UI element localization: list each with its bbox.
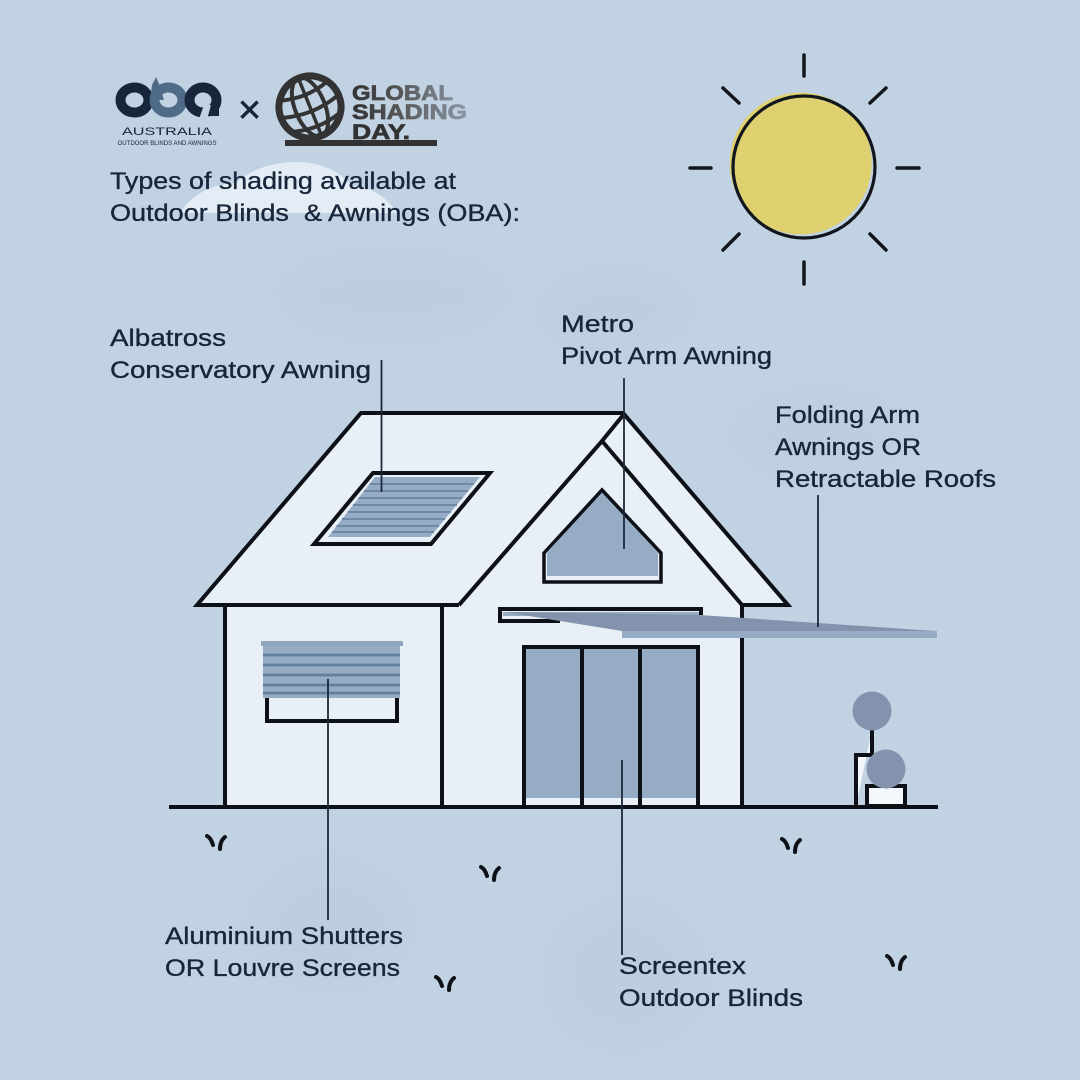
house outline <box>169 413 938 807</box>
logo: Global Shading Day: SHADING <box>352 101 467 124</box>
heading: Types of shading available at <box>110 168 456 195</box>
folding arm awning <box>504 612 937 638</box>
cloud behind heading <box>180 162 397 213</box>
label: Folding Arm: Folding Arm <box>775 402 920 429</box>
label: Metro: Pivot Arm Awning <box>561 343 772 370</box>
label: Folding Arm <box>775 402 996 493</box>
icon: sun <box>690 55 919 284</box>
label: Screentex <box>619 953 803 1012</box>
logo: Global Shading Day: DAY. <box>352 121 410 144</box>
heading <box>110 168 520 227</box>
grass tufts <box>207 836 905 990</box>
logo: Global Shading Day <box>270 67 467 147</box>
label: Aluminium Shutters: OR Louvre Screens <box>165 955 400 982</box>
leader lines <box>328 360 818 955</box>
sliding doors with outdoor blinds <box>524 647 698 807</box>
awning cassette <box>500 609 701 621</box>
label: Folding Arm: Retractable Roofs <box>775 466 996 493</box>
illustration: house <box>169 413 938 807</box>
logo: OBA Australia: AUSTRALIA <box>122 126 213 138</box>
skylight with conservatory awning <box>314 473 490 544</box>
label: Albatross: Albatross <box>110 325 226 352</box>
label: Metro <box>561 311 772 370</box>
label: Aluminium Shutters: Aluminium Shutters <box>165 923 403 950</box>
potted plants <box>852 692 906 806</box>
background haze patches <box>245 247 912 1053</box>
logo: OBA Australia: OUTDOOR BLINDS AND AWNINGS <box>118 141 216 147</box>
heading: Outdoor Blinds & Awnings (OBA): <box>110 200 520 227</box>
logo: OBA Australia <box>118 77 219 147</box>
multiplication sign: × <box>238 88 261 132</box>
label: Metro: Metro <box>561 311 634 338</box>
dormer window with pivot arm awning <box>544 490 661 582</box>
label: Screentex: Screentex <box>619 953 746 980</box>
roof and walls <box>197 413 788 807</box>
label: Folding Arm: Awnings OR <box>775 434 921 461</box>
aluminium shutter window <box>261 641 403 721</box>
label: Aluminium Shutters <box>165 923 403 982</box>
label: Albatross <box>110 325 371 384</box>
label: Screentex: Outdoor Blinds <box>619 985 803 1012</box>
label: Albatross: Conservatory Awning <box>110 357 371 384</box>
logo: Global Shading Day: GLOBAL <box>352 82 453 105</box>
